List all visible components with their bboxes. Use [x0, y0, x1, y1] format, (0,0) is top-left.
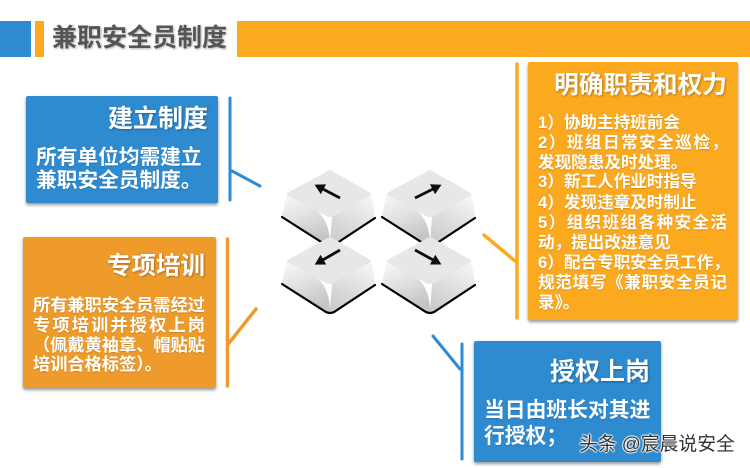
panel heading: 建立制度: [108, 105, 208, 133]
watermark: 头条 @宸晨说安全: [579, 433, 735, 454]
panel text: （佩戴黄袖章、帽贴贴: [33, 334, 205, 354]
panel text: 规范填写《兼职安全员记: [538, 273, 727, 292]
header blue block: [0, 21, 31, 57]
panel heading: 专项培训: [107, 253, 205, 280]
key: up-right arrow: [382, 170, 475, 247]
panel text: 录》。: [538, 293, 579, 312]
connector: 授权上岗: [433, 336, 462, 459]
connector: 建立制度: [230, 98, 260, 200]
panel text: 专项培训并授权上岗: [33, 314, 205, 334]
panel: 建立制度: [26, 96, 218, 203]
panel heading: 明确职责和权力: [554, 72, 727, 99]
keys: four arrow keys: [282, 170, 475, 314]
panel text: 5）组织班组各种安全活: [538, 213, 727, 232]
panel text: [484, 398, 650, 448]
panel text: [36, 146, 202, 192]
panel text: 6）配合专职安全员工作，: [538, 253, 730, 272]
panel text: 培训合格标签）。: [33, 354, 162, 374]
panel text: 所有单位均需建立: [36, 146, 202, 168]
panel text: 2）班组日常安全巡检，: [538, 133, 728, 152]
panel: 授权上岗: [474, 341, 661, 462]
panel heading: 授权上岗: [550, 358, 650, 386]
connector: 明确职责和权力: [484, 64, 517, 318]
key: up-left arrow: [282, 170, 375, 247]
key: down-left arrow: [282, 237, 375, 314]
panel text: [33, 295, 205, 374]
panel text: 所有兼职安全员需经过: [33, 295, 205, 315]
panel text: 动，提出改进意见: [538, 233, 671, 252]
panel text: 当日由班长对其进: [484, 399, 650, 422]
panel text: 行授权；: [484, 425, 567, 448]
title: 兼职安全员制度: [52, 24, 227, 52]
panel text: 4）发现违章及时制止: [538, 192, 697, 212]
connector: 专项培训: [228, 239, 256, 386]
key: down-right arrow: [382, 237, 475, 314]
panel text: [538, 113, 730, 312]
panel: 专项培训: [23, 237, 216, 388]
panel: 明确职责和权力: [528, 62, 738, 320]
panel text: 兼职安全员制度。: [36, 169, 202, 192]
panel text: 发现隐患及时处理。: [538, 153, 687, 172]
panel text: 1）协助主持班前会: [538, 113, 680, 132]
panel text: 3）新工人作业时指导: [538, 172, 697, 191]
header orange bar: [237, 21, 750, 57]
header bar: [0, 21, 750, 57]
header orange accent: [35, 21, 44, 57]
